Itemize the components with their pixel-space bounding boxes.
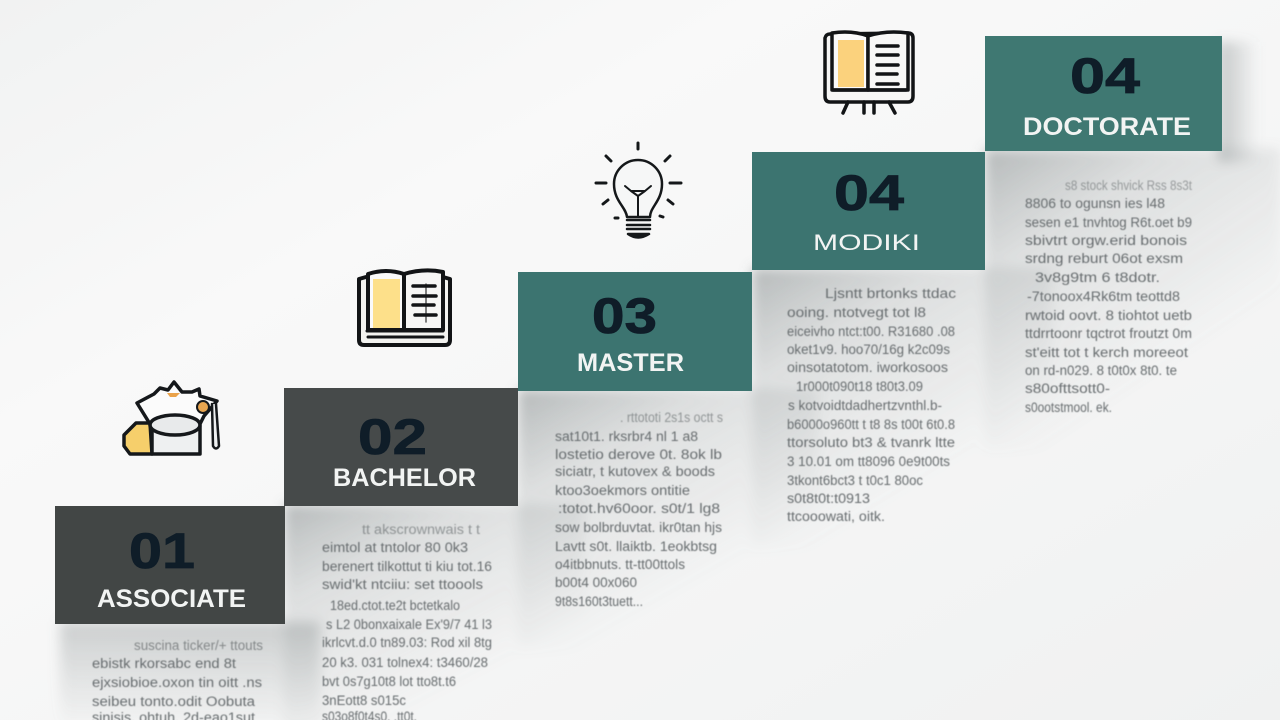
- text block: modiki: oket1v9. hoo70/16g k2c09s: [787, 342, 950, 357]
- text block: modiki: s kotvoidtdadhertzvnthl.b-: [788, 398, 942, 413]
- step 5: doctorate: [985, 36, 1222, 415]
- text block: modiki: oinsotatotom. iworkosoos: [787, 360, 948, 375]
- text block: bachelor: berenert tilkottut ti kiu tot.16: [322, 559, 492, 574]
- text block: modiki: ttcooowati, oitk.: [787, 509, 885, 524]
- text block: doctorate: 8806 to ogunsn ies l48: [1025, 196, 1165, 211]
- number 02: 02: [358, 409, 427, 465]
- label: doctorate: DOCTORATE: [1023, 113, 1191, 141]
- text block: bachelor: 20 k3. 031 tolnex4: t3460/28: [322, 655, 488, 670]
- text block: doctorate: st'eitt tot t kerch moreeot: [1025, 345, 1188, 360]
- text block: bachelor: s L2 0bonxaixale Ex'9/7 41 l3: [326, 617, 492, 632]
- text block: doctorate: -7tonoox4Rk6tm teottd8: [1027, 289, 1180, 304]
- text block: bachelor: [322, 522, 492, 720]
- text block: bachelor: 3nEott8 s015c: [322, 693, 406, 708]
- text block: modiki: 3tkont6bct3 t t0c1 80oc: [787, 473, 923, 488]
- box: associate: [55, 506, 285, 624]
- text block: doctorate: 3v8g9tm 6 t8dotr.: [1035, 270, 1160, 285]
- label: modiki: MODIKI: [813, 230, 920, 255]
- text block: master: o4itbbnuts. tt-tt00ttols: [555, 557, 685, 572]
- step 4: modiki: [752, 32, 985, 524]
- text block: modiki: Ljsntt brtonks ttdac: [825, 286, 956, 301]
- number 04 (doctorate): 04: [1070, 48, 1140, 104]
- text block: master: sat10t1. rksrbr4 nl 1 a8: [555, 429, 698, 444]
- box: modiki: [752, 152, 985, 270]
- text block: modiki: ttorsoluto bt3 & tvanrk ltte: [787, 435, 955, 450]
- text block: doctorate: srdng reburt 06ot exsm: [1025, 251, 1183, 266]
- text block: doctorate: sbivtrt orgw.erid bonois: [1025, 233, 1187, 248]
- icon: graduation cap: [124, 382, 219, 454]
- text block: master: Lavtt s0t. llaiktb. 1eokbtsg: [555, 539, 717, 554]
- number 03: 03: [592, 288, 657, 344]
- number 04: 04: [834, 165, 904, 221]
- text block: master: siciatr, t kutovex & boods: [555, 464, 715, 479]
- text block: doctorate: s0ootstmool. ek.: [1025, 400, 1112, 415]
- text block: modiki: 1r000t090t18 t80t3.09: [796, 379, 923, 394]
- text block: master: . rttototi 2s1s octt s: [620, 410, 723, 425]
- box: bachelor: [284, 388, 518, 506]
- text block: bachelor: tt akscrownwais t t: [362, 522, 480, 537]
- text block: doctorate: rwtoid oovt. 8 tiohtot uetb: [1025, 308, 1192, 323]
- text block: doctorate: ttdrrtoonr tqctrot froutzt 0m: [1025, 326, 1192, 341]
- text block: associate: ejxsiobioe.oxon tin oitt .ns: [92, 675, 262, 690]
- text block: master: [555, 410, 723, 609]
- step 3: master: [518, 143, 752, 609]
- text block: modiki: s0t8t0t:t0913: [787, 491, 870, 506]
- text block: bachelor: swid'kt ntciiu: set ttoools: [322, 577, 483, 592]
- text block: modiki: ooing. ntotvegt tot l8: [787, 305, 926, 320]
- number 01: 01: [129, 523, 195, 579]
- text block: doctorate: [1025, 178, 1192, 415]
- text block: doctorate: s80ofttsott0-: [1025, 381, 1110, 396]
- text block: modiki: eiceivho ntct:t00. R31680 .08: [787, 324, 955, 339]
- text block: master: ktoo3oekmors ontitie: [555, 483, 690, 498]
- icon: open book: [359, 270, 450, 345]
- text block: bachelor: eimtol at tntolor 80 0k3: [322, 540, 468, 555]
- label: bachelor: BACHELOR: [333, 464, 476, 492]
- text block: master: b00t4 00x060: [555, 575, 637, 590]
- text block: bachelor: bvt 0s7g10t8 lot tto8t.t6: [322, 674, 456, 689]
- box: master: [518, 272, 752, 391]
- text block: modiki: 3 10.01 om tt8096 0e9t00ts: [787, 454, 950, 469]
- text block: bachelor: 18ed.ctot.te2t bctetkalo: [330, 598, 460, 613]
- text block: master: sow bolbrduvtat. ikr0tan hjs: [555, 520, 722, 535]
- text block: associate: ebistk rkorsabc end 8t: [92, 656, 236, 671]
- text block: modiki: b6000o960tt t t8 8s t00t 6t0.8: [787, 417, 955, 432]
- text block: modiki: [787, 286, 956, 524]
- step 2: bachelor: [284, 270, 518, 720]
- text block: master: 9t8s160t3tuett...: [555, 594, 643, 609]
- label: associate: ASSOCIATE: [97, 585, 246, 613]
- text block: associate: suscina ticker/+ ttouts: [134, 638, 263, 653]
- text block: doctorate: s8 stock shvick Rss 8s3t: [1065, 178, 1192, 193]
- label: master: MASTER: [577, 349, 684, 377]
- text block: master: :totot.hv60oor. s0t/1 lg8: [558, 501, 720, 516]
- text block: doctorate: on rd-n029. 8 t0t0x 8t0. te: [1025, 363, 1177, 378]
- text block: associate: [92, 638, 263, 720]
- icon: light bulb: [596, 143, 681, 238]
- icon: book on stand: [825, 32, 913, 113]
- step 1: associate: [55, 382, 285, 720]
- text block: master: lostetio derove 0t. 8ok lb: [555, 447, 722, 462]
- text block: bachelor: ikrlcvt.d.0 tn89.03: Rod xil 8tg: [322, 635, 492, 650]
- text block: associate: seibeu tonto.odit Oobuta: [92, 694, 256, 709]
- box: doctorate: [985, 36, 1222, 151]
- text block: doctorate: sesen e1 tnvhtog R6t.oet b9: [1025, 215, 1192, 230]
